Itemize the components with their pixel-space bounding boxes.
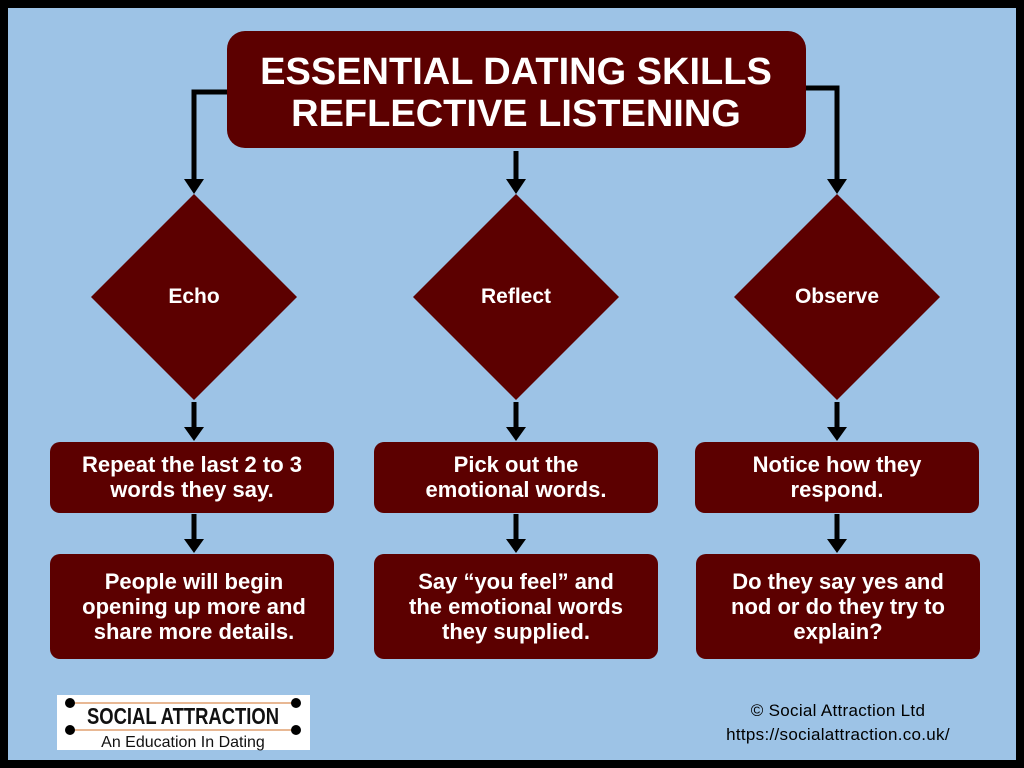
title: ESSENTIAL DATING SKILLS [260,51,772,93]
box: reflect step 1 [374,442,658,513]
box: reflect step 1: emotional words. [426,477,606,502]
arrow: title to Reflect [506,151,526,194]
title [227,31,806,148]
box: observe step 2: Do they say yes and [732,569,944,594]
diamond: Observe: Observe [795,285,879,308]
title: REFLECTIVE LISTENING [291,93,741,135]
diamond: Reflect: Reflect [481,285,551,308]
box: observe step 2 [696,554,980,659]
box: echo step 1 [50,442,334,513]
box: observe step 1: Notice how they [753,452,922,477]
logo: SOCIAL ATTRACTION [87,703,279,729]
copyright: https://socialattraction.co.uk/ [726,725,950,744]
diamond: Echo: Echo [168,285,220,308]
box: echo step 2: opening up more and [82,594,306,619]
box: echo step 2 [50,554,334,659]
arrow: title to Observe [805,88,847,194]
copyright: © Social Attraction Ltd [751,701,925,720]
arrows: diamonds to boxes [184,402,847,553]
box: echo step 2: People will begin [105,569,283,594]
box: reflect step 2 [374,554,658,659]
diamond: Observe [734,194,940,400]
box: reflect step 2: the emotional words [409,594,623,619]
box: observe step 2: explain? [793,619,883,644]
box: echo step 1: Repeat the last 2 to 3 [82,452,302,477]
copyright [726,701,950,744]
box: reflect step 1: Pick out the [454,452,578,477]
box: echo step 2: share more details. [94,619,294,644]
box: observe step 2: nod or do they try to [731,594,945,619]
box: observe step 1 [695,442,979,513]
box: reflect step 2: they supplied. [442,619,590,644]
box: echo step 1: words they say. [109,477,274,502]
box: reflect step 2: Say “you feel” and [418,569,614,594]
diamond: Echo [91,194,297,400]
diamond: Reflect [413,194,619,400]
arrow: title to Echo [184,92,228,194]
logo: An Education In Dating [101,734,265,751]
box: observe step 1: respond. [791,477,883,502]
logo [57,695,310,751]
